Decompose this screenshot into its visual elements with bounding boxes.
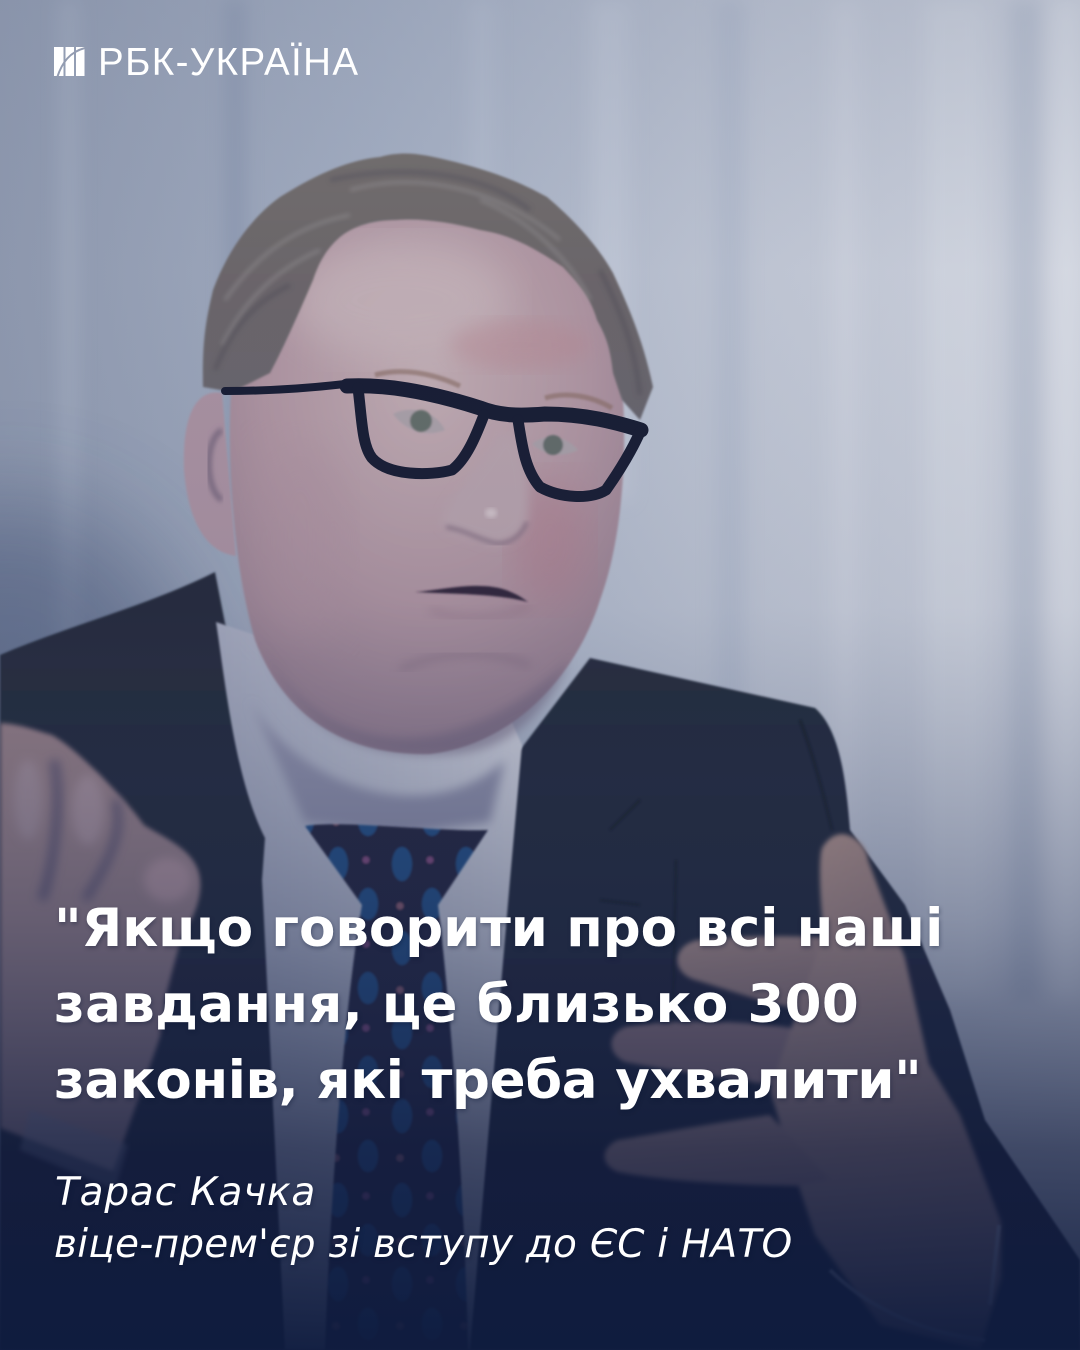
eyebrows [375,372,612,408]
shirt collar and front [216,622,522,1350]
chin crease and jowl shadow [262,640,570,755]
eyes [393,410,578,455]
mouth [415,586,530,618]
quote heading: завдання, це близько 300 [54,974,859,1035]
face [230,216,624,754]
quote heading: законів, які треба ухвалити" [54,1050,921,1111]
left raised hand [0,723,200,1171]
pinky finger [604,1115,830,1186]
jacket pocket and lapel folds [600,720,832,1060]
suit jacket [0,572,1080,1350]
forehead highlight and cheek tint [250,240,590,640]
glasses [225,384,641,496]
left shirt cuff [20,1110,128,1190]
attribution: speaker position: віце-прем'єр зі вступу до ЄС і НАТО [54,1222,792,1267]
hair [203,154,653,420]
logo wordmark: РБК-УКРАЇНА [98,41,359,84]
right shirt cuff [830,1225,999,1340]
quote heading: "Якщо говорити про всі наші [54,898,943,959]
tie [305,824,488,1350]
palm and wrist [770,935,1001,1350]
logo icon [54,47,84,76]
attribution: speaker name: Тарас Качка [55,1170,316,1215]
nose [442,432,528,545]
neck shadow [250,700,505,835]
quote heading [54,898,943,1112]
ear inner shadow [209,430,222,500]
thumb [820,834,905,1040]
index finger [677,936,880,1012]
ear [184,392,236,556]
right raised hand [604,834,1001,1350]
middle finger [611,1022,860,1100]
logo: РБК-Україна [54,41,359,84]
